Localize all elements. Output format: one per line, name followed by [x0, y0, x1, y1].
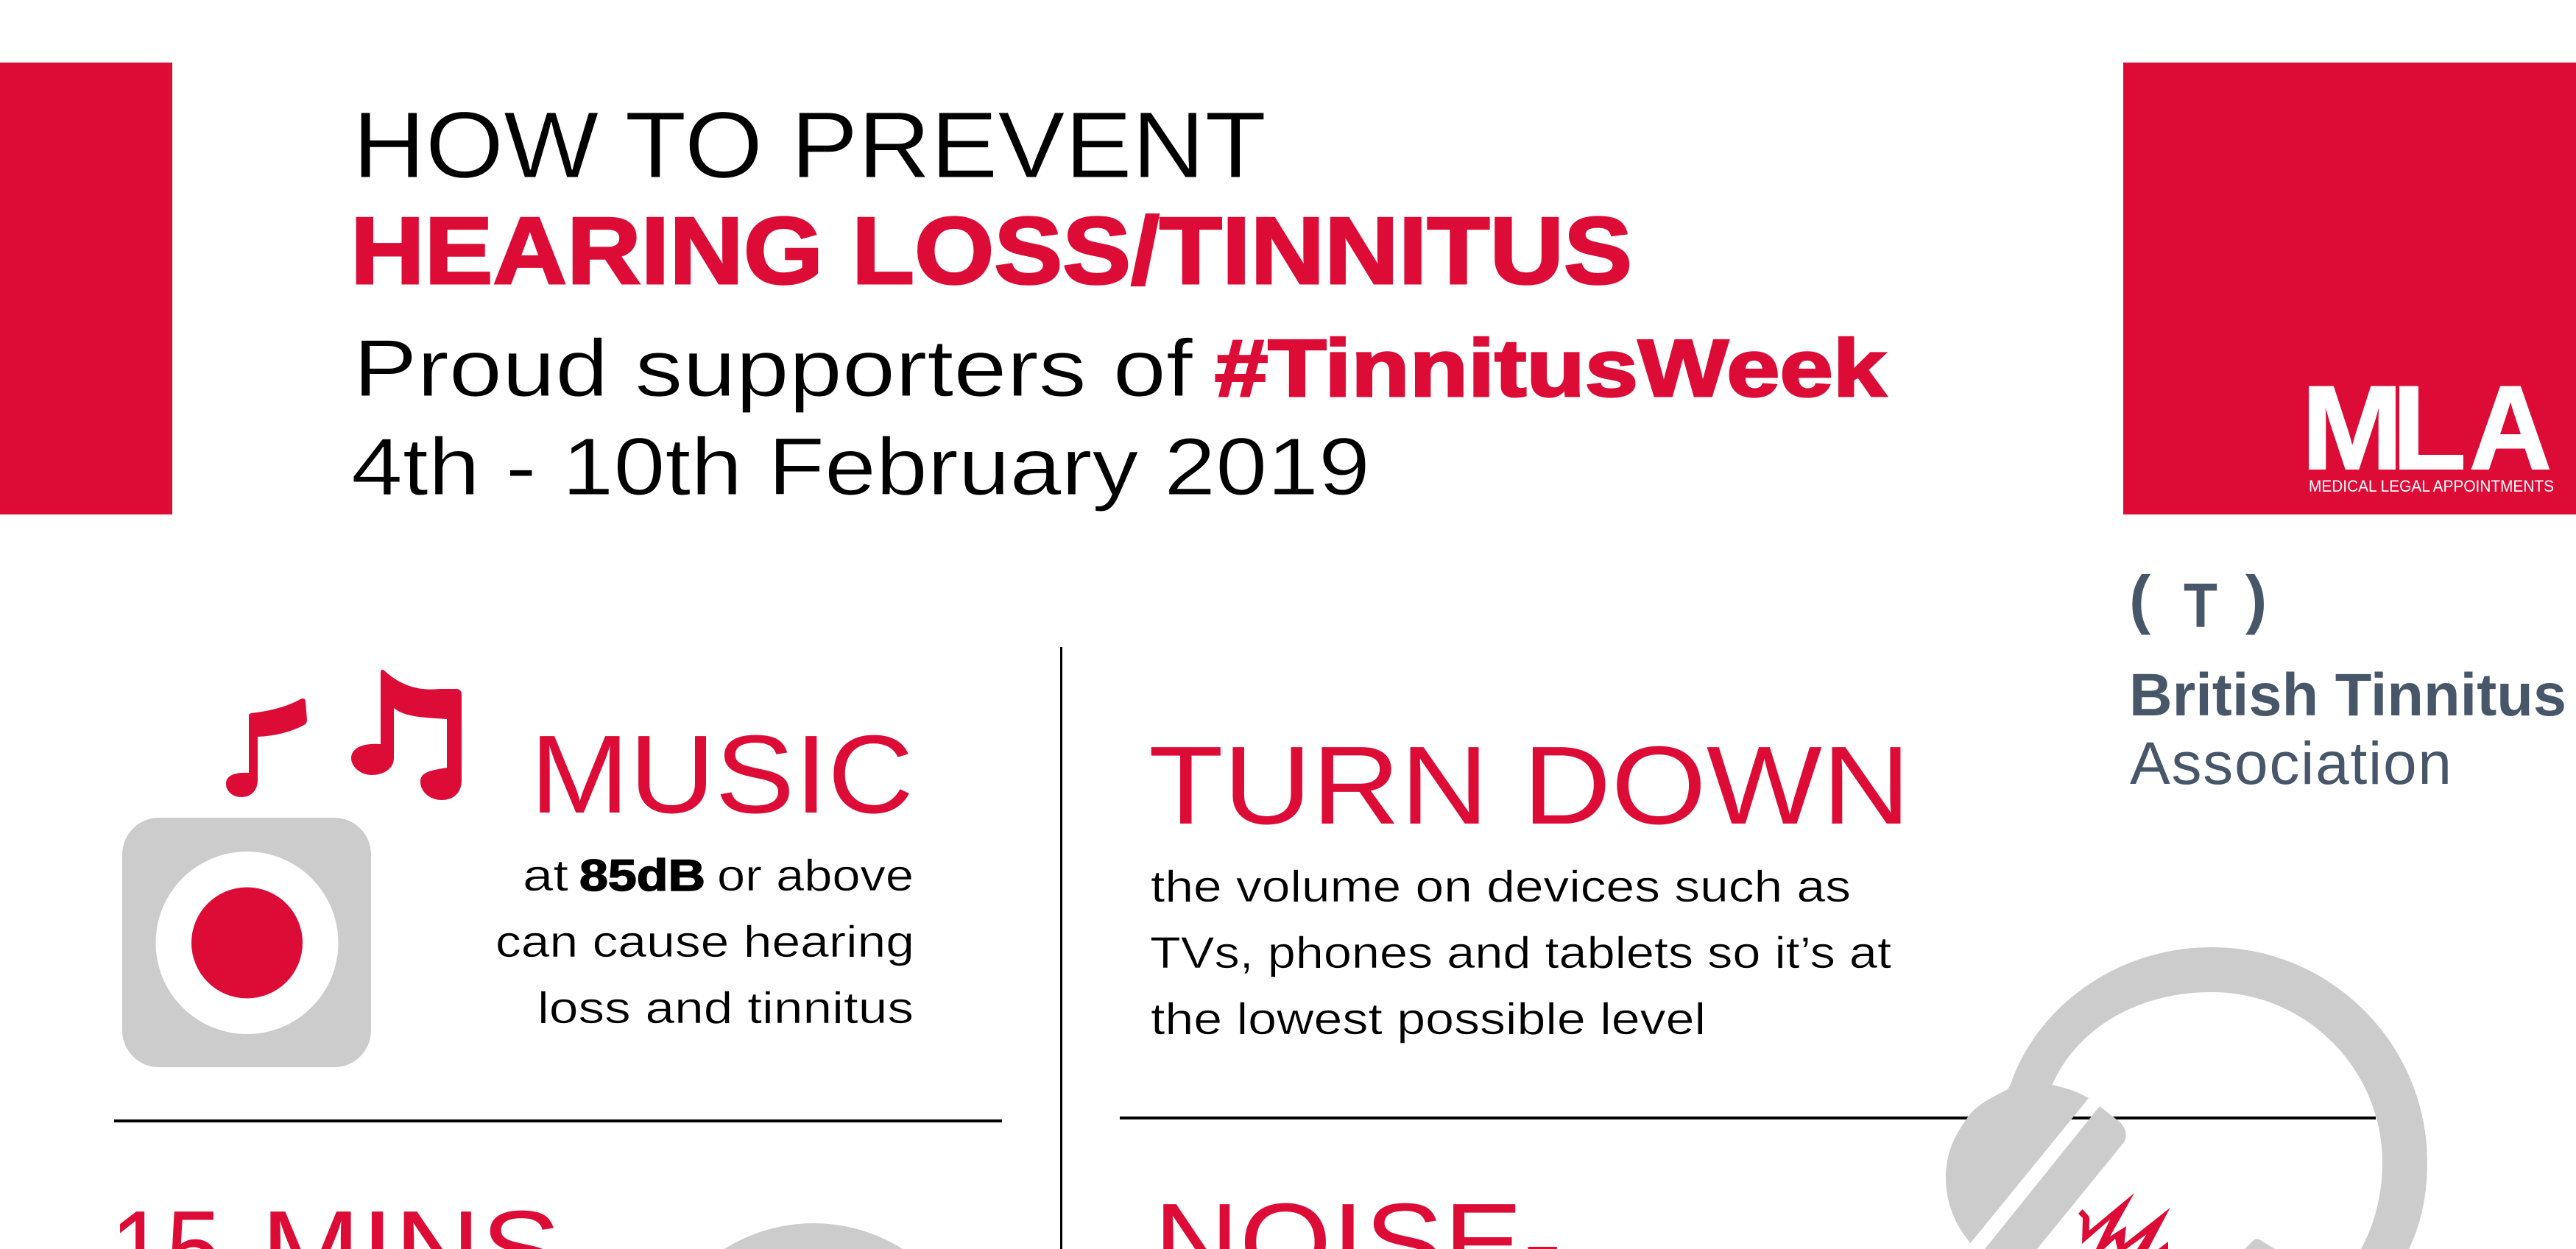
heading: TURN DOWN: TURN DOWN — [1148, 723, 1910, 847]
text block: music: can cause hearing — [495, 917, 914, 966]
title: HEARING LOSS/TINNITUS — [350, 198, 1632, 304]
text block: music: 85dB — [579, 851, 705, 900]
title: #TinnitusWeek — [1215, 323, 1887, 414]
panel: British Tinnitus Association logo: ( — [2129, 562, 2151, 635]
text block: turn down: TVs, phones and tablets so it’s at — [1150, 928, 1891, 977]
icon: grey dome — [646, 1223, 981, 1249]
left red block — [0, 63, 172, 514]
text block: turn down — [1150, 862, 1891, 1044]
icon: speaker — [122, 818, 371, 1067]
panel: British Tinnitus Association logo: T — [2184, 571, 2217, 641]
text block: turn down: the lowest possible level — [1151, 994, 1706, 1044]
panel: MLA logo block: L — [2392, 361, 2466, 495]
panel: MLA logo block: M — [2301, 361, 2403, 495]
icon: headphones — [1946, 947, 2427, 1249]
title: 4th - 10th February 2019 — [351, 422, 1370, 512]
panel: British Tinnitus Association logo — [2129, 562, 2566, 797]
text block: music: loss and tinnitus — [537, 983, 914, 1033]
title — [350, 93, 1887, 512]
panel: British Tinnitus Association logo: ) — [2245, 562, 2267, 635]
text block: music: at — [523, 851, 568, 900]
heading: MUSIC: MUSIC — [530, 712, 914, 836]
title: Proud supporters of — [353, 323, 1193, 414]
text block: music: or above — [717, 851, 914, 900]
text block: turn down: the volume on devices such as — [1151, 862, 1851, 911]
horizontal divider left — [114, 1119, 1002, 1122]
text block: music — [495, 851, 914, 1033]
heading: 15 MINS — [110, 1187, 561, 1249]
panel: MLA logo block: A — [2469, 361, 2552, 495]
title: HOW TO PREVENT — [353, 93, 1266, 198]
horizontal divider right — [1120, 1117, 2376, 1119]
icon: music notes — [226, 670, 462, 800]
panel: MLA logo block: MEDICAL LEGAL APPOINTMENTS — [2309, 477, 2554, 495]
panel: British Tinnitus Association logo: Association — [2130, 730, 2452, 797]
vertical divider — [1060, 647, 1062, 1249]
panel: MLA logo block — [2123, 63, 2576, 514]
panel: British Tinnitus Association logo: British Tinnitus — [2129, 662, 2566, 729]
